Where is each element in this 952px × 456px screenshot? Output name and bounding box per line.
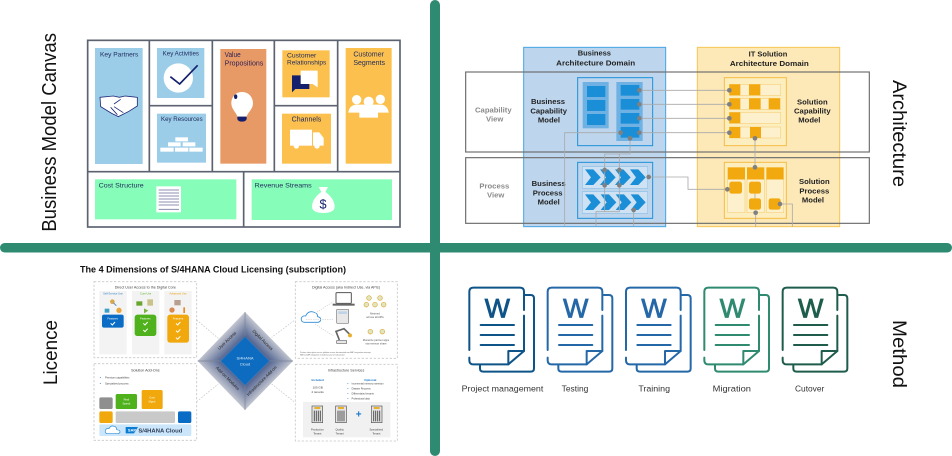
panel: business model canvas xyxy=(39,33,400,232)
SAP logo and product name: S/4HANA Cloud xyxy=(138,429,183,435)
box: digital access: SAP-to-SAP integration included as part of subscription xyxy=(300,354,345,357)
box: solution add-ons: Specialized process xyxy=(105,381,129,385)
icon: check circle xyxy=(164,63,198,93)
icons: tenant servers xyxy=(312,406,382,423)
doc: training xyxy=(626,288,691,372)
panel: licence xyxy=(80,265,397,441)
box: infrastructure services: Included xyxy=(312,378,324,382)
icon: light bulb xyxy=(231,92,253,122)
icon: laptop xyxy=(333,293,355,306)
block: customer relationships: Customer xyxy=(287,52,317,59)
heading: Method: Method xyxy=(888,320,909,388)
process view band: Process xyxy=(479,182,509,191)
block: key resources xyxy=(157,114,206,163)
solution process model: Solution xyxy=(799,177,830,186)
block: revenue streams: Revenue Streams xyxy=(255,183,312,190)
icon: speech bubbles xyxy=(292,71,318,92)
business architecture domain xyxy=(524,47,666,227)
method labels: Testing xyxy=(562,384,589,394)
business process model: Model xyxy=(538,197,560,206)
dashed connectors to diamond xyxy=(197,320,294,402)
icon: tablet xyxy=(337,309,349,323)
process view band xyxy=(466,158,869,223)
block: key activities xyxy=(157,48,204,98)
box: infrastructure services: Specialized xyxy=(370,428,384,432)
feature cards: Features xyxy=(173,316,184,320)
IT solution architecture domain xyxy=(697,47,840,227)
block: value propositions xyxy=(220,49,266,164)
solution capability model: Model xyxy=(798,116,820,125)
box: direct user access: Self-Service Use xyxy=(103,292,123,296)
box: solution add-ons: Solution Add-Ons xyxy=(131,369,160,373)
connector lines xyxy=(565,90,792,227)
block: value propositions: Propositions xyxy=(225,61,264,68)
icon cluster: managed access xyxy=(364,296,386,334)
box: infrastructure services: Production xyxy=(311,428,324,432)
box: infrastructure services: Optional xyxy=(364,378,377,382)
block: customer segments: Customer xyxy=(353,51,385,58)
icon: handshake xyxy=(100,96,137,117)
business process model xyxy=(532,162,653,218)
doc: project management: W xyxy=(485,293,511,323)
box: solution add-ons xyxy=(94,364,197,440)
block: customer segments: Segments xyxy=(353,60,386,67)
box: digital access: Digital Access (aka Indirect Use, via APIs) xyxy=(312,286,380,290)
doc: cutover xyxy=(783,288,847,372)
box: infrastructure services: Incremental memory extension xyxy=(352,383,384,386)
panel: architecture xyxy=(466,47,869,227)
box: digital access: across all APIs xyxy=(366,315,384,319)
icon: cloud outline xyxy=(105,426,120,434)
block: customer relationships xyxy=(282,50,330,97)
box: infrastructure services: Tenant xyxy=(313,432,322,436)
box: solution add-ons: Mgmt xyxy=(149,399,156,403)
method labels: Migration xyxy=(713,384,751,394)
diamond: four dimensions: Add-on Modules xyxy=(215,365,241,391)
doc: testing: W xyxy=(563,293,589,323)
business architecture domain: Architecture Domain xyxy=(556,58,636,67)
box: digital access: Metered xyxy=(370,311,380,315)
diamond: four dimensions: Cloud xyxy=(240,361,250,366)
box: direct user access xyxy=(94,282,197,358)
box: infrastructure services: Tenant xyxy=(372,432,381,436)
icons: user tiers xyxy=(105,299,185,313)
heading: Architecture: Architecture xyxy=(888,80,909,187)
block: key resources: Key Resources xyxy=(161,116,203,123)
block: customer relationships: Relationships xyxy=(287,60,327,67)
icon: document xyxy=(156,186,181,212)
box: infrastructure services: Disaster Recovery xyxy=(352,388,372,391)
box: solution add-ons: Cost xyxy=(149,395,155,399)
block: key partners: Key Partners xyxy=(100,52,139,59)
box: infrastructure services: Quality xyxy=(336,428,344,432)
business capability model: Capability xyxy=(530,106,568,115)
box: infrastructure services: + xyxy=(356,409,362,420)
method labels xyxy=(462,384,825,394)
IT solution architecture domain: Architecture Domain xyxy=(730,59,809,68)
box: solution add-ons: Premium capabilities xyxy=(105,376,130,380)
box: digital access: via revenue share xyxy=(365,342,387,346)
connector dots xyxy=(602,88,782,215)
box: digital access xyxy=(295,282,397,358)
block: revenue streams xyxy=(252,179,392,220)
solution process model: Process xyxy=(799,186,829,195)
box: infrastructure services: Infrastructure Services xyxy=(328,369,364,373)
box: solution add-ons: Spend xyxy=(122,401,131,405)
icon: cloud xyxy=(301,312,321,322)
block: key activities: Key Activities xyxy=(163,50,199,57)
box: infrastructure services: Professional data xyxy=(352,397,370,400)
doc: migration xyxy=(704,288,769,372)
block: cost structure xyxy=(95,179,236,219)
capability view band xyxy=(466,72,869,152)
icon: robot arm xyxy=(336,329,352,343)
box: direct user access: Advanced Use xyxy=(169,292,187,296)
box: infrastructure services: 2 tenants xyxy=(312,390,324,394)
box: direct user access: Core Use xyxy=(140,292,152,296)
capability view band: Capability xyxy=(475,105,512,114)
box: direct user access: Direct User Access to the Digital Core xyxy=(115,285,176,289)
box: digital access: Partner subscription access platform across documented non-SAP integration message xyxy=(300,351,371,354)
diamond: four dimensions: Digital Access xyxy=(251,329,274,351)
box: infrastructure services: 100 GB xyxy=(313,385,323,389)
block: customer segments xyxy=(346,48,392,164)
business process model: Business xyxy=(532,179,566,188)
method labels: Training xyxy=(638,384,670,394)
method labels: Cutover xyxy=(795,384,825,394)
solution process model: Model xyxy=(802,196,824,205)
canvas frame xyxy=(88,40,400,227)
doc: testing xyxy=(548,288,612,372)
box: solution add-ons: Real xyxy=(124,397,129,401)
diamond: four dimensions: User Access xyxy=(217,330,237,351)
solution capability model: Solution xyxy=(797,97,828,106)
doc: project management xyxy=(469,288,534,372)
business architecture domain: Business xyxy=(578,49,611,58)
panel: method documents xyxy=(462,288,847,394)
feature cards: Features xyxy=(140,316,151,320)
diamond: four dimensions: Infrastructure Add-on xyxy=(246,364,278,397)
heading: licensing title: The 4 Dimensions of S/4HANA Cloud Licensing (subscription) xyxy=(80,265,346,275)
process view band: View xyxy=(487,191,504,200)
icon: money bag: $ xyxy=(319,197,327,211)
diamond: four dimensions: S/4HANA xyxy=(236,356,254,361)
block: value propositions: Value xyxy=(225,52,241,59)
solution capability model: Capability xyxy=(794,107,831,116)
feature cards: Features xyxy=(107,316,119,320)
block: channels xyxy=(282,114,331,164)
block: key partners xyxy=(95,48,143,164)
business capability model: Model xyxy=(538,116,560,125)
box: infrastructure services: Differentiated tenants xyxy=(352,393,375,396)
SAP logo and product name xyxy=(126,427,183,435)
diamond: four dimensions xyxy=(198,312,293,410)
icon: bricks xyxy=(160,137,203,152)
box: digital access: Monetize partner apps xyxy=(363,338,390,342)
box: infrastructure services xyxy=(295,364,397,441)
icon: truck xyxy=(290,130,324,149)
doc: training: W xyxy=(641,293,667,323)
heading: Licence: Licence xyxy=(41,320,62,385)
solution process model xyxy=(724,162,830,218)
business capability model xyxy=(530,78,653,146)
doc: migration: W xyxy=(720,293,746,323)
block: cost structure: Cost Structure xyxy=(99,183,144,190)
SAP logo and product name: SAP xyxy=(128,428,136,433)
business capability model: Business xyxy=(531,97,565,106)
method labels: Project management xyxy=(462,384,544,394)
business process model: Process xyxy=(533,188,563,197)
box: infrastructure services: Tenant xyxy=(336,432,344,436)
icon: people xyxy=(348,95,389,118)
doc: cutover: W xyxy=(798,293,824,323)
capability view band: View xyxy=(486,115,503,124)
IT solution architecture domain: IT Solution xyxy=(749,49,788,58)
feature cards xyxy=(102,315,189,343)
heading: Business Model Canvas: Business Model Canvas xyxy=(39,33,61,232)
icon: money bag xyxy=(312,187,335,213)
block: channels: Channels xyxy=(292,116,322,123)
solution capability model xyxy=(724,78,831,146)
